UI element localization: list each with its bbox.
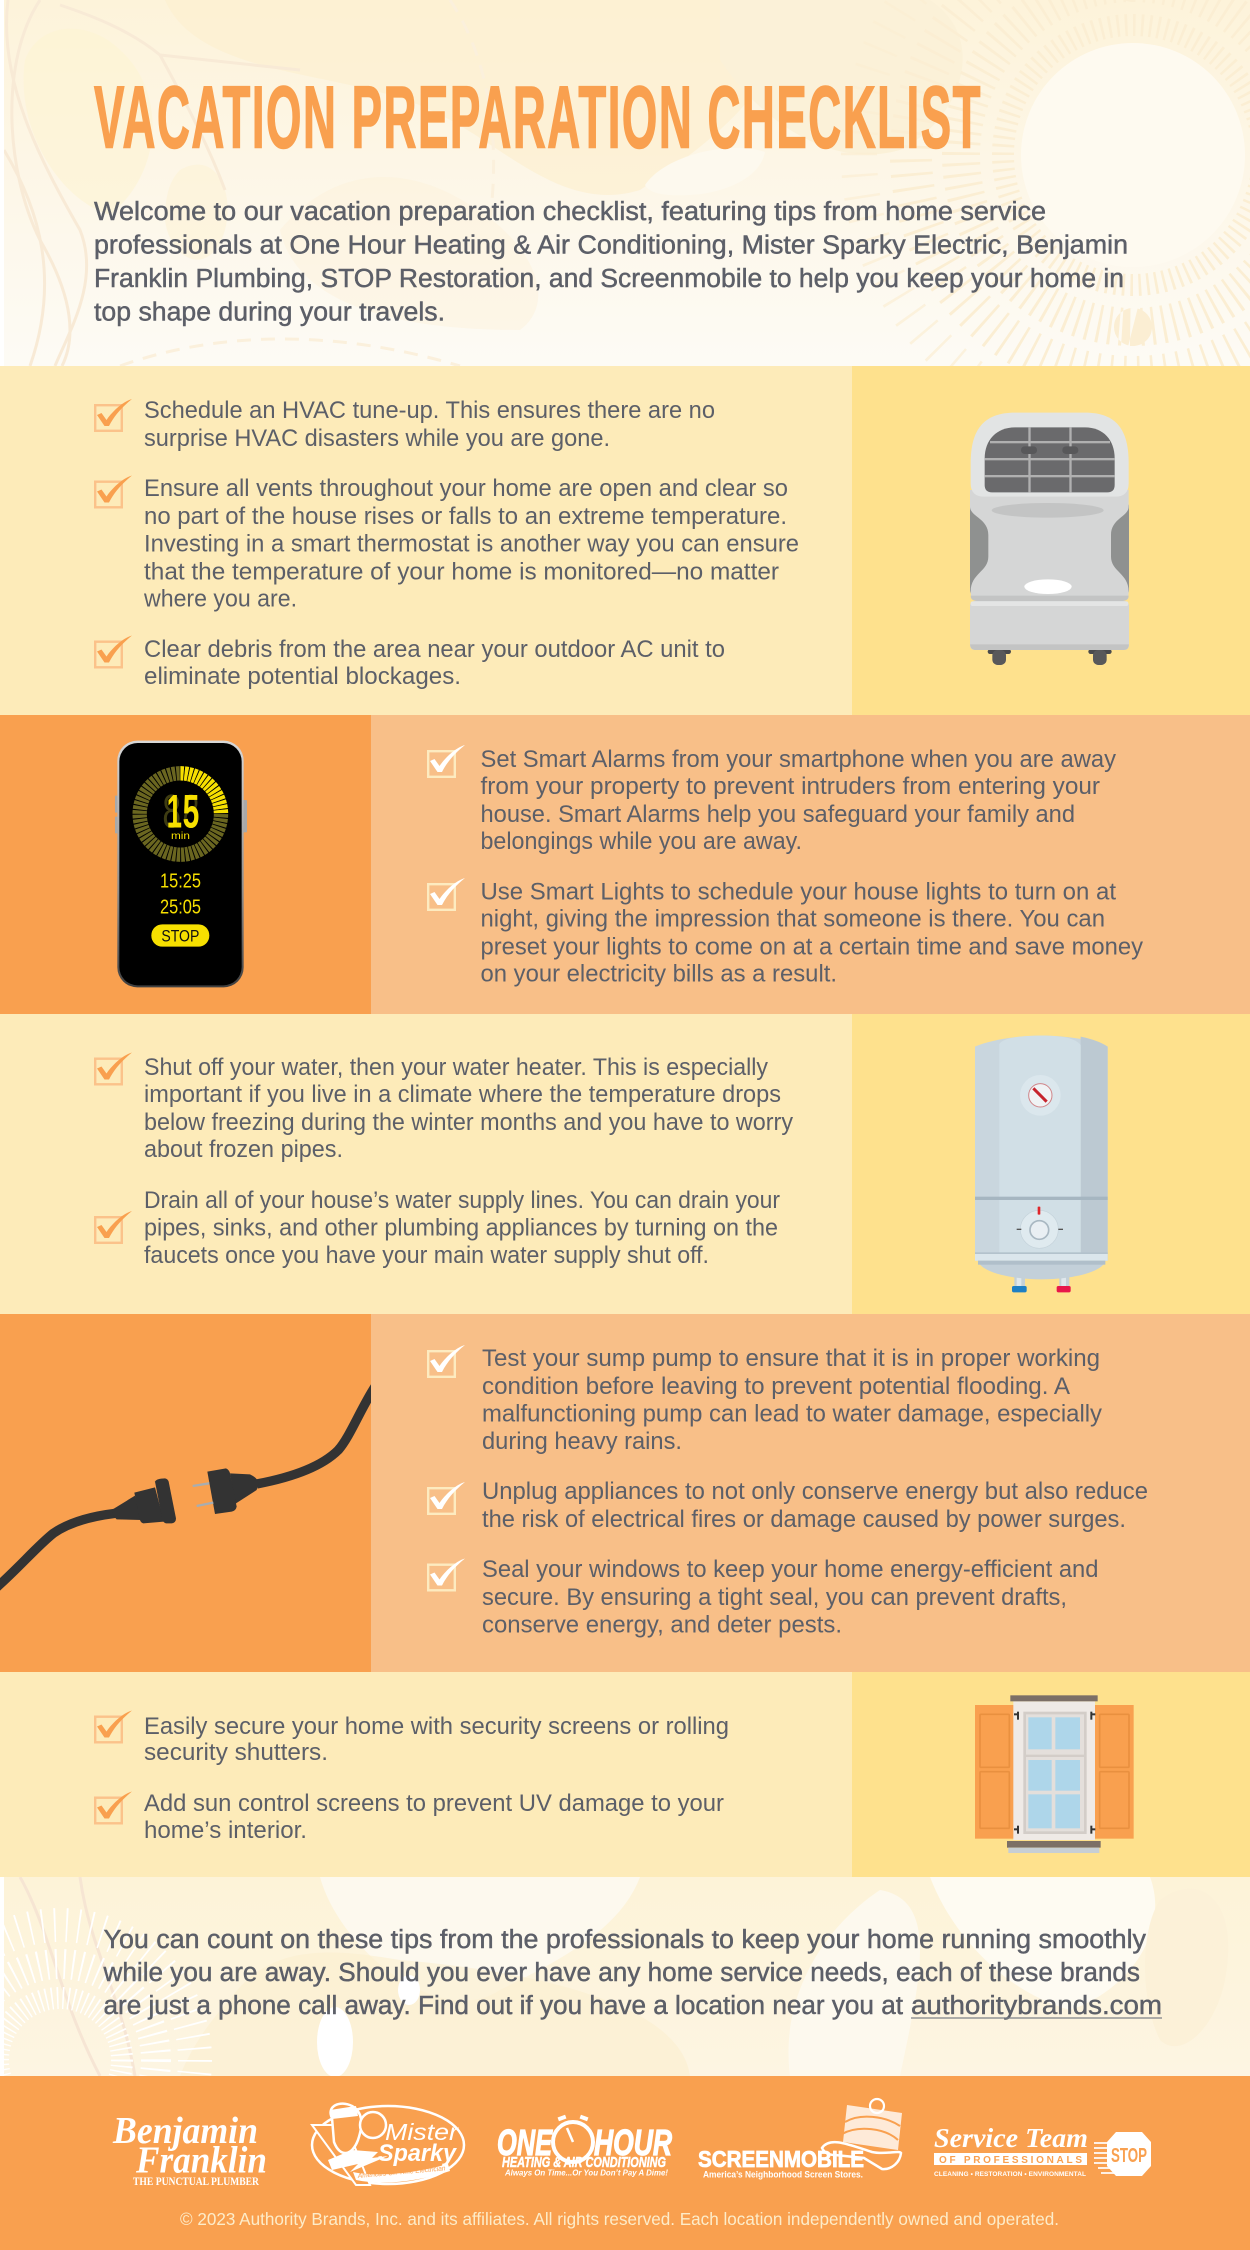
panel: screens background [0,1672,1250,1877]
tip text: smart lights: preset your lights to come on at a certain time and save money [480,934,1143,960]
tip text: vents: Ensure all vents throughout your home are open and clear so [144,475,788,502]
tip text: sump pump [482,1345,1102,1455]
panel: electrical background [0,1314,371,1672]
tip text: sun control [144,1790,724,1844]
tip text: smart lights [480,878,1143,988]
logo: Benjamin Franklin [112,2110,267,2188]
closing text block: authoritybrands.com [911,1992,1162,2020]
panel: header background [4,0,1250,366]
icon: checkbox [428,1482,465,1514]
icon: checkbox [95,1792,132,1823]
panel: plumbing tips [95,1052,793,1269]
icon: checkbox [428,1345,465,1377]
tip text: sun control: home’s interior. [144,1817,307,1844]
icon: smartphone timer: min [171,831,190,842]
tip text: sump pump: during heavy rains. [482,1428,682,1455]
tip text: HVAC tune-up [144,397,715,452]
icon: smartphone timer [115,741,247,987]
tip text: security screens: security shutters. [144,1739,328,1766]
icon: checkbox [95,476,132,507]
logo: Service Team of Professionals STOP: Service Team [934,2123,1088,2153]
closing text block: while you are away. Should you ever have any home service needs, each of these brands [102,1959,1140,1987]
logo: Benjamin Franklin: THE PUNCTUAL PLUMBER [133,2174,259,2188]
logo: One Hour Heating & Air Conditioning: HOUR [594,2122,672,2163]
logo: One Hour Heating & Air Conditioning: Always On Time...Or You Don’t Pay A Dime! [504,2168,668,2178]
logo: Benjamin Franklin: Franklin [135,2140,267,2182]
tip text: security screens: Easily secure your home with security screens or rolling [144,1713,729,1740]
tip text: vents: Investing in a smart thermostat is another way you can ensure [144,530,799,558]
icon: checkbox [428,745,465,777]
tip text: smart alarms: from your property to prevent intruders from entering your [480,773,1100,800]
tip text: seal windows: secure. By ensuring a tight seal, you can prevent drafts, [482,1584,1067,1611]
tip text: AC debris [144,636,725,690]
tip text: water shutoff: important if you live in a climate where the temperature drops [144,1081,781,1108]
icon: checkbox [95,1710,132,1742]
panel: HVAC tips [95,397,799,690]
icon: checkbox [95,1211,132,1243]
intro text block: Franklin Plumbing, STOP Restoration, and Screenmobile to help you keep your home in [94,265,1124,293]
copyright: © 2023 Authority Brands, Inc. and its affiliates. All rights reserved. Each location independently owned and operated. [180,2209,1059,2229]
icon: smartphone timer: 8 [183,785,199,838]
closing text block [102,1926,1162,2020]
tip text: drain lines: pipes, sinks, and other plumbing appliances by turning on the [144,1214,778,1242]
logo: Service Team of Professionals STOP: OF PROFESSIONALS [939,2155,1082,2166]
icon: unplugged power cord [0,1387,375,1587]
tip text: water shutoff [144,1054,793,1163]
tip text: smart alarms: Set Smart Alarms from your smartphone when you are away [480,746,1116,773]
tip text: smart lights: night, giving the impression that someone is there. You can [480,906,1105,932]
logo: Mister Sparky: Mister [385,2119,460,2145]
icon: checkbox [95,1052,132,1084]
logo: Screenmobile: SCREENMOBILE [698,2146,864,2172]
tip text: seal windows [482,1556,1098,1638]
icon: smartphone timer: 25:05 [160,896,201,919]
intro text block: top shape during your travels. [94,298,445,326]
logo: Screenmobile: America’s Neighborhood Screen Stores. [703,2170,863,2180]
tip text: water shutoff: below freezing during the winter months and you have to worry [144,1109,793,1136]
icon: smartphone timer: 15:25 [160,869,201,892]
logo: One Hour Heating & Air Conditioning [497,2115,672,2178]
tip text: AC debris: eliminate potential blockages. [144,663,461,690]
tip text: HVAC tune-up: Schedule an HVAC tune-up. This ensures there are no [144,397,715,424]
white blob [645,148,764,186]
logo: One Hour Heating & Air Conditioning: ONE [497,2122,553,2163]
panel: smart home tips [428,745,1143,988]
tip text: sump pump: condition before leaving to prevent potential flooding. A [482,1373,1070,1400]
panel: HVAC tips background [0,366,1250,715]
tip text: vents: where you are. [143,586,297,612]
logo: Service Team of Professionals STOP: STOP [1111,2145,1147,2167]
tip text: security screens [144,1713,729,1766]
tip text: vents [143,475,799,612]
icon: smartphone timer: 8 [162,785,181,838]
tip text: drain lines: faucets once you have your main water supply shut off. [144,1242,709,1269]
tip text: HVAC tune-up: surprise HVAC disasters while you are gone. [144,425,610,452]
tip text: unplug appliances: the risk of electrical fires or damage caused by power surges. [482,1506,1126,1533]
logo: One Hour Heating & Air Conditioning: HEATING & AIR CONDITIONING [502,2155,666,2171]
tip text: smart alarms [480,746,1116,855]
tip text: smart alarms: belongings while you are away. [480,828,802,855]
intro text block: Welcome to our vacation preparation checklist, featuring tips from home service [94,198,1046,226]
panel: screens tips [95,1710,729,1844]
tip text: sun control: Add sun control screens to prevent UV damage to your [144,1790,724,1817]
icon: smartphone timer: 5 [183,785,199,838]
icon: smartphone timer: STOP [161,926,199,945]
icon: portable air conditioner [970,413,1129,665]
tip text: drain lines: Drain all of your house’s water supply lines. You can drain your [144,1187,780,1214]
icon: water heater [975,1036,1108,1292]
tip text: sump pump: malfunctioning pump can lead to water damage, especially [482,1400,1102,1428]
icon: checkbox [428,878,465,910]
tip text: unplug appliances [482,1478,1148,1533]
tip text: smart lights: Use Smart Lights to schedule your house lights to turn on at [480,878,1116,906]
tip text: smart alarms: house. Smart Alarms help you safeguard your family and [480,801,1075,828]
panel: smart home background [0,715,1250,1014]
tip text: water shutoff: Shut off your water, then your water heater. This is especially [144,1054,768,1081]
icon: checkbox [428,1558,465,1590]
tip text: smart lights: on your electricity bills as a result. [480,960,837,988]
logo: Service Team of Professionals STOP [934,2123,1151,2178]
logo: Service Team of Professionals STOP: CLEANING • RESTORATION • ENVIRONMENTAL [934,2171,1086,2178]
closing text block: are just a phone call away. Find out if you have a location near you at [104,1992,903,2020]
tip text: AC debris: Clear debris from the area near your outdoor AC unit to [144,636,725,663]
intro text block [94,198,1128,326]
tip text: water shutoff: about frozen pipes. [144,1136,343,1163]
panel: footer background [0,2076,1250,2250]
tip text: seal windows: conserve energy, and deter pests. [482,1612,842,1638]
tip text: vents: no part of the house rises or falls to an extreme temperature. [144,503,787,530]
icon: checkbox [95,399,132,431]
logo: Mister Sparky: America’s On-Time Electrician [357,2165,446,2180]
tip text: sump pump: Test your sump pump to ensure that it is in proper working [482,1345,1100,1372]
intro text block: professionals at One Hour Heating & Air Conditioning, Mister Sparky Electric, Benjamin [94,232,1128,260]
icon: smartphone timer: 1 [167,785,182,838]
logo: Mister Sparky [312,2104,464,2185]
tip text: drain lines [144,1187,780,1269]
icon: window with shutters [975,1695,1134,1853]
tip text: seal windows: Seal your windows to keep your home energy-efficient and [482,1556,1098,1583]
icon: checkbox [95,636,132,667]
panel: electrical tips background [371,1314,1250,1672]
tip text: vents: that the temperature of your home is monitored—no matter [144,558,779,586]
logo: Benjamin Franklin: Benjamin [112,2110,258,2152]
panel: plumbing background [0,1014,1250,1314]
sun rays [841,14,1250,366]
logo: Mister Sparky: Sparky [378,2140,458,2167]
closing text block: You can count on these tips from the professionals to keep your home running smoothly [104,1926,1146,1954]
tip text: unplug appliances: Unplug appliances to not only conserve energy but also reduce [482,1478,1148,1505]
logo: Screenmobile [698,2099,902,2180]
panel: electrical tips [428,1345,1148,1638]
panel: closing background [4,1877,1250,2076]
